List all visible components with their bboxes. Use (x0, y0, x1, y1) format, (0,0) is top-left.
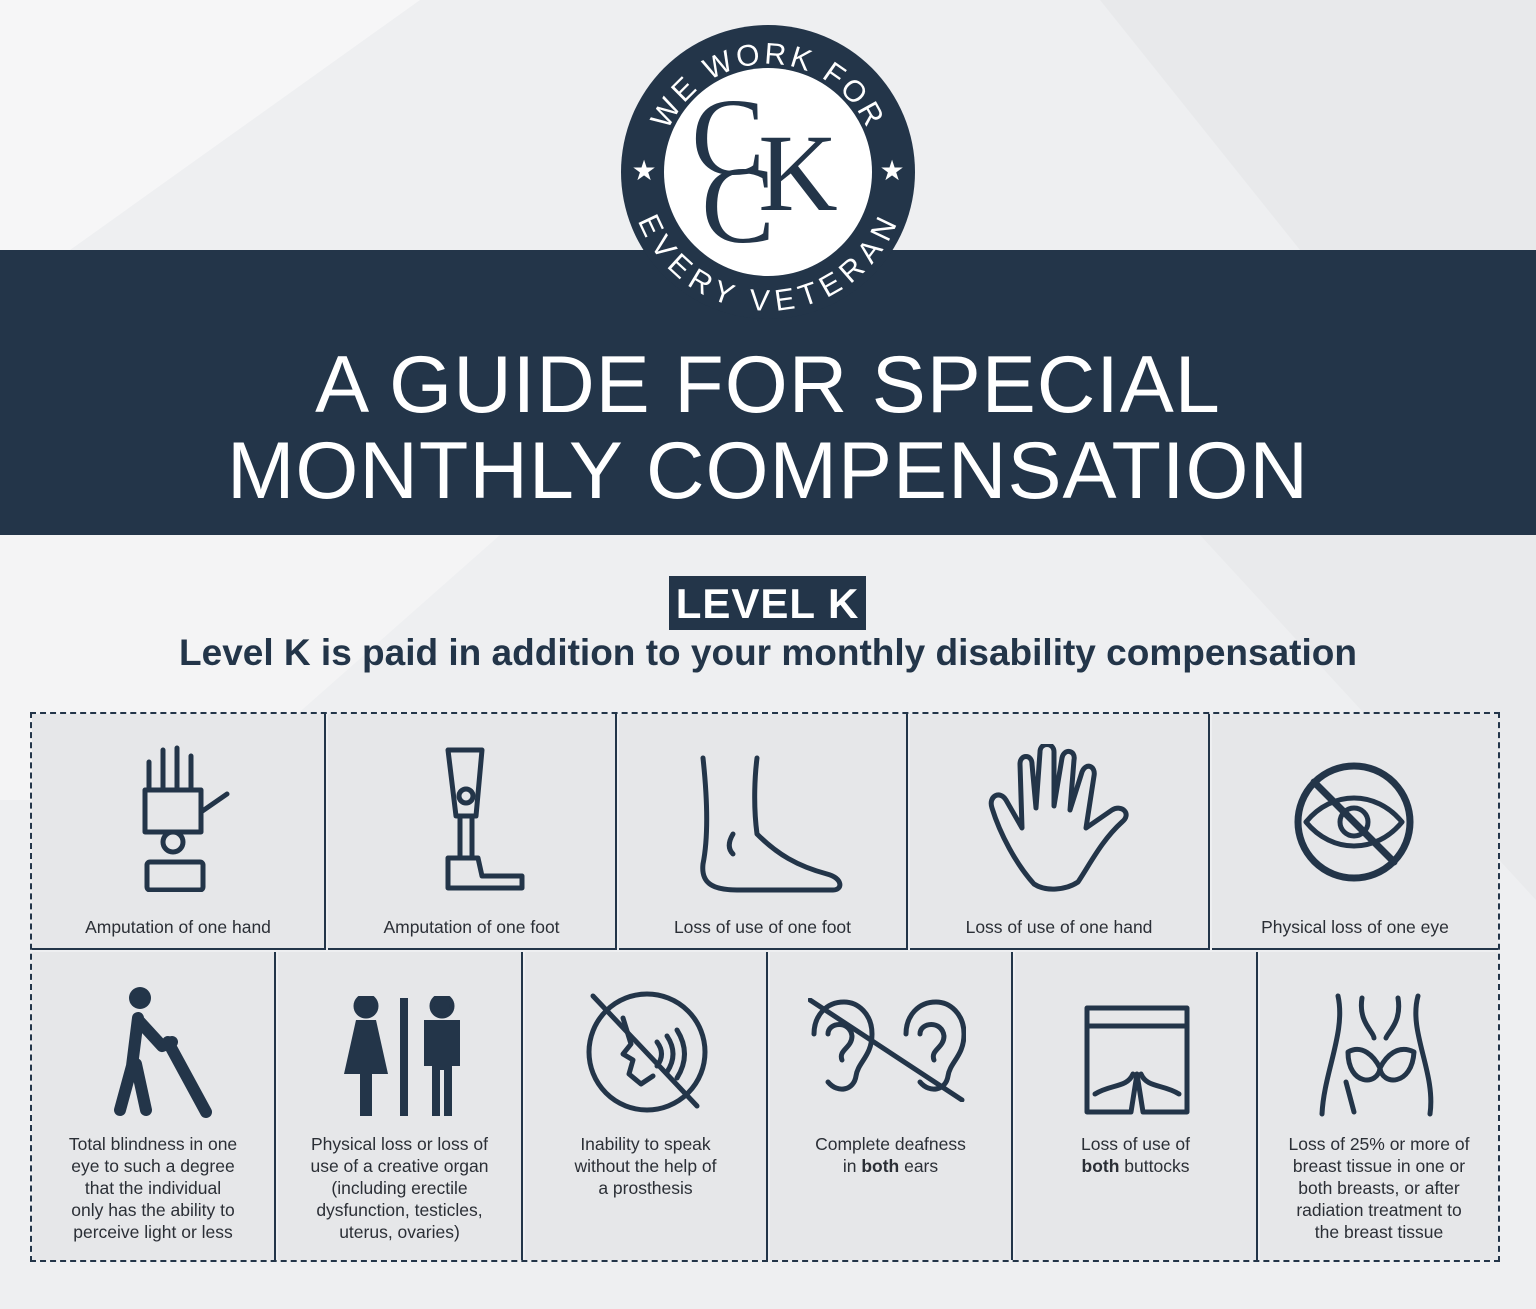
logo: EVERY VETERAN (638, 214, 896, 311)
title: MONTHLY COMPENSATION (227, 426, 1309, 516)
cell: creative organ: (including erectile (331, 1178, 468, 1198)
cell: total blindness: only has the ability to (71, 1200, 235, 1220)
cell: physical loss of one eye (1212, 714, 1498, 950)
cell: creative organ: dysfunction, testicles, (316, 1200, 483, 1220)
cell: loss of use of one foot (619, 714, 908, 950)
cell: physical loss of one eye: Physical loss of one eye (1261, 917, 1449, 937)
dark title band (0, 250, 1536, 535)
cell: deafness (770, 952, 1013, 1260)
cell: loss of use of one hand: Loss of use of one hand (966, 917, 1152, 937)
cell: total blindness: Total blindness in one (69, 1134, 237, 1154)
cell: loss of use of one foot: Loss of use of one foot (674, 917, 851, 937)
cell: breast tissue (1260, 952, 1498, 1260)
cell: amputation of one hand: Amputation of one hand (85, 917, 271, 937)
title (227, 340, 1309, 516)
logo (621, 25, 915, 311)
cell: creative organ (278, 952, 523, 1260)
logo: C (691, 76, 765, 198)
cell: total blindness: perceive light or less (73, 1222, 233, 1242)
logo: ★ (631, 155, 657, 186)
cell: creative organ: uterus, ovaries) (339, 1222, 460, 1242)
cell: total blindness (32, 952, 276, 1260)
cell: creative organ: Physical loss or loss of (311, 1134, 488, 1154)
logo: C (701, 144, 775, 266)
cell: amputation of one foot (328, 714, 617, 950)
cell: inability to speak: without the help of (574, 1156, 717, 1176)
cell: breast tissue: breast tissue in one or (1293, 1156, 1465, 1176)
subtitle: Level K is paid in addition to your monthly disability compensation (179, 632, 1357, 673)
cell: inability to speak: a prosthesis (598, 1178, 693, 1198)
cell: breast tissue: both breasts, or after (1298, 1178, 1460, 1198)
grid of conditions (30, 712, 1500, 1262)
cell: buttocks: both buttocks (1082, 1156, 1189, 1176)
cell: creative organ: use of a creative organ (310, 1156, 489, 1176)
cell: breast tissue: the breast tissue (1315, 1222, 1443, 1242)
logo: K (758, 112, 838, 234)
cell: total blindness: that the individual (85, 1178, 221, 1198)
cell: amputation of one foot: Amputation of one foot (383, 917, 560, 937)
cell: total blindness: eye to such a degree (71, 1156, 235, 1176)
cell: deafness: Complete deafness (815, 1134, 966, 1154)
cell: inability to speak (525, 952, 768, 1260)
cell: inability to speak: Inability to speak (580, 1134, 711, 1154)
cell: buttocks (1015, 952, 1258, 1260)
cell: breast tissue: Loss of 25% or more of (1289, 1134, 1469, 1154)
cell: deafness: in both ears (843, 1156, 938, 1176)
level k heading: LEVEL K (676, 580, 859, 627)
cell: amputation of one hand (32, 714, 326, 950)
logo: ★ (879, 155, 905, 186)
cell: buttocks: Loss of use of (1081, 1134, 1190, 1154)
cell: loss of use of one hand (910, 714, 1210, 950)
cell: breast tissue: radiation treatment to (1296, 1200, 1462, 1220)
title: A GUIDE FOR SPECIAL (315, 340, 1221, 430)
logo: WE WORK FOR (650, 43, 882, 127)
